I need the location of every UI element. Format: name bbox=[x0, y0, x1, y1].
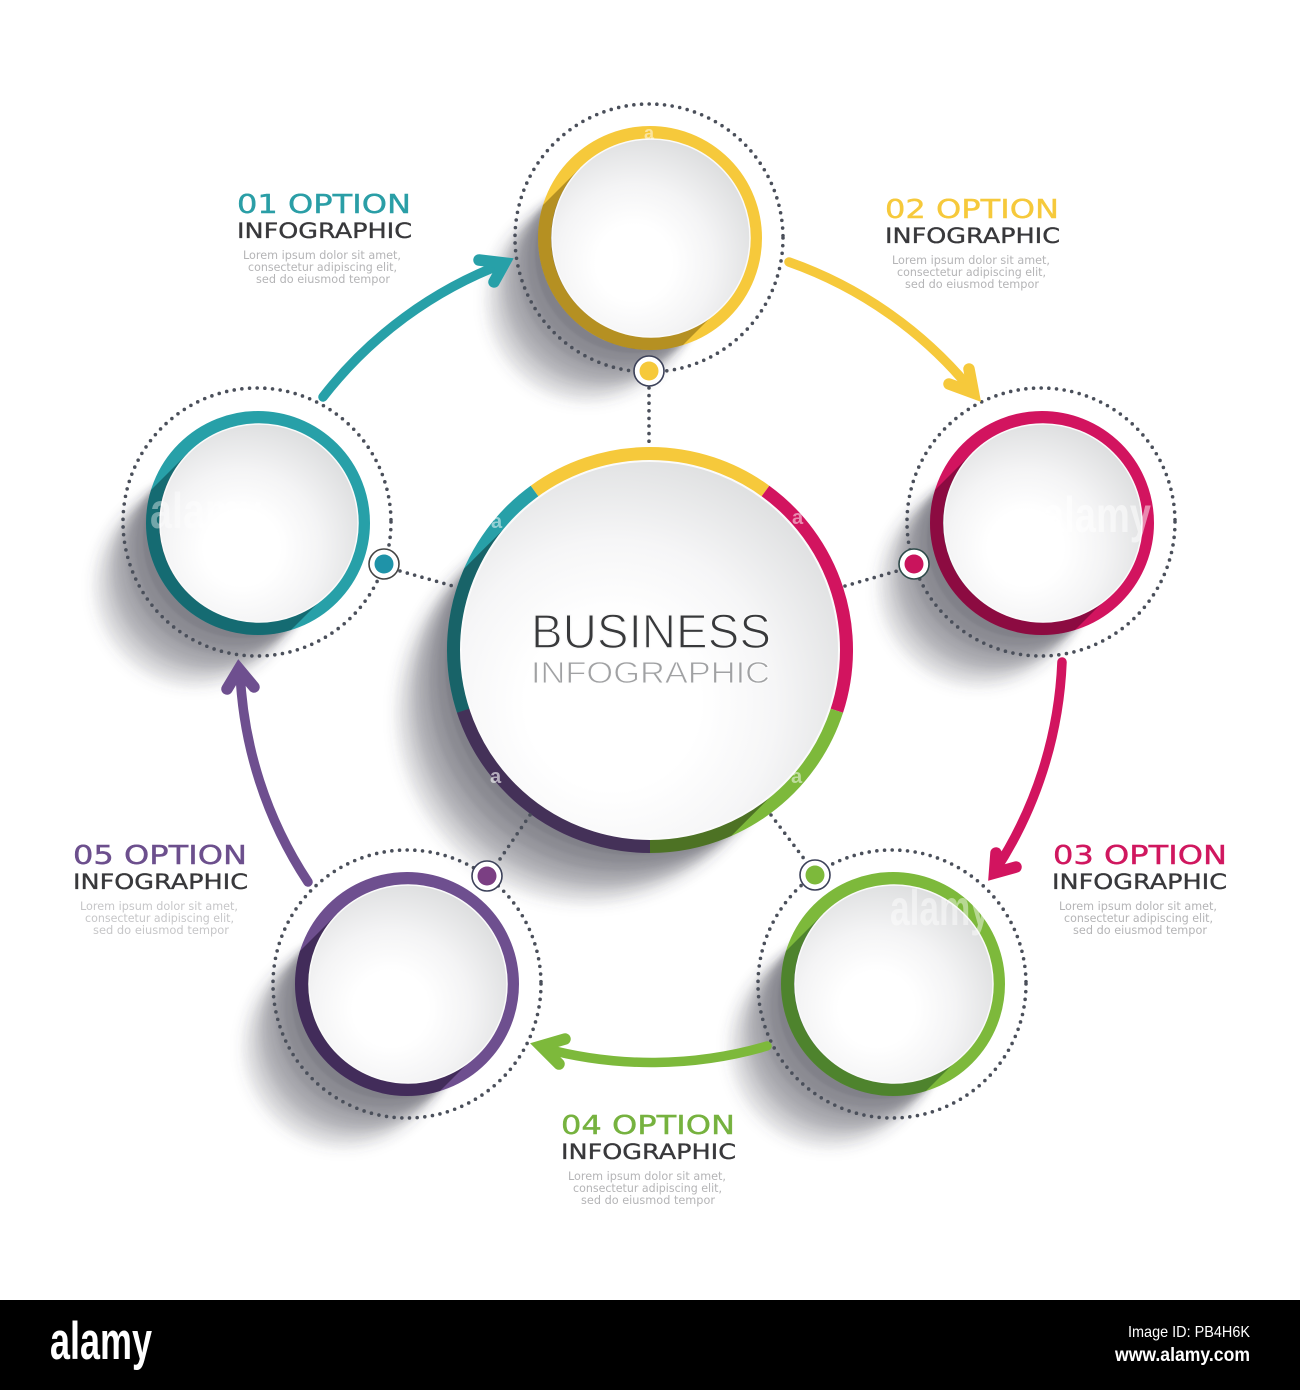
disc bbox=[795, 885, 993, 1083]
step circle: green bbox=[726, 848, 1028, 1151]
body text bbox=[568, 1169, 726, 1207]
node: green bbox=[800, 860, 830, 890]
body text: consectetur adipiscing elit, bbox=[85, 911, 234, 925]
heading: 02 OPTION bbox=[885, 195, 1059, 225]
ring bbox=[152, 418, 364, 628]
watermarks bbox=[150, 123, 1151, 936]
body text: Lorem ipsum dolor sit amet, bbox=[1059, 899, 1217, 913]
subheading: INFOGRAPHIC bbox=[73, 870, 248, 894]
watermarks: a bbox=[490, 766, 502, 788]
footer logo: alamy bbox=[50, 1312, 152, 1371]
footer bar bbox=[0, 1300, 1300, 1390]
central disc bbox=[461, 461, 839, 839]
body text bbox=[80, 899, 238, 937]
shadow bbox=[95, 432, 349, 686]
arrow: yellow to crimson bbox=[789, 262, 974, 393]
site url: www.alamy.com bbox=[1114, 1345, 1250, 1366]
step circle: crimson bbox=[875, 386, 1177, 690]
body text: Lorem ipsum dolor sit amet, bbox=[80, 899, 238, 913]
body text: sed do eiusmod tempor bbox=[581, 1193, 715, 1207]
label: 01 option bbox=[237, 190, 412, 286]
arrow: green to purple bbox=[541, 1039, 767, 1064]
central circle: business infographic bbox=[366, 454, 846, 934]
watermarks: alamy bbox=[890, 880, 990, 936]
watermarks: alamy bbox=[1043, 487, 1151, 543]
ring shade bbox=[146, 453, 317, 635]
body text: consectetur adipiscing elit, bbox=[897, 265, 1046, 279]
disc bbox=[944, 424, 1142, 622]
subheading: INFOGRAPHIC bbox=[1052, 870, 1227, 894]
step circle: yellow bbox=[483, 102, 785, 405]
dotted connectors bbox=[400, 388, 897, 862]
disc bbox=[309, 885, 507, 1083]
central long shadow bbox=[397, 469, 831, 903]
dotted orbit bbox=[123, 388, 391, 656]
body text: Lorem ipsum dolor sit amet, bbox=[892, 253, 1050, 267]
body text bbox=[1059, 899, 1217, 937]
label: 05 option bbox=[73, 841, 248, 937]
body text: consectetur adipiscing elit, bbox=[573, 1181, 722, 1195]
heading: 05 OPTION bbox=[73, 841, 247, 871]
body text: sed do eiusmod tempor bbox=[256, 272, 390, 286]
step circle: teal bbox=[91, 386, 393, 690]
ring bbox=[936, 418, 1148, 628]
label: 02 option bbox=[885, 195, 1060, 291]
label: 04 option bbox=[561, 1111, 736, 1207]
node: teal bbox=[369, 549, 399, 579]
dotted orbit bbox=[907, 388, 1175, 656]
disc bbox=[552, 139, 750, 337]
heading: 01 OPTION bbox=[237, 190, 411, 220]
subheading: INFOGRAPHIC bbox=[237, 219, 412, 243]
ring bbox=[302, 878, 512, 1090]
watermarks: a bbox=[644, 123, 655, 143]
heading: 03 OPTION bbox=[1053, 841, 1227, 871]
node: purple bbox=[472, 861, 502, 891]
ring bbox=[788, 878, 998, 1090]
body text: Lorem ipsum dolor sit amet, bbox=[568, 1169, 726, 1183]
label: 03 option bbox=[1052, 841, 1227, 937]
shadow bbox=[244, 893, 498, 1147]
image id: Image ID: PB4H6K bbox=[1128, 1324, 1250, 1341]
central title bbox=[531, 606, 771, 690]
shadow bbox=[487, 147, 741, 401]
body text: Lorem ipsum dolor sit amet, bbox=[243, 248, 401, 262]
ring shade bbox=[295, 914, 466, 1096]
watermarks: alamy bbox=[150, 483, 262, 539]
ring shade bbox=[930, 453, 1101, 635]
body text: consectetur adipiscing elit, bbox=[248, 260, 397, 274]
disc bbox=[160, 424, 358, 622]
body text bbox=[892, 253, 1050, 291]
dotted orbit bbox=[273, 850, 541, 1118]
body text: sed do eiusmod tempor bbox=[1073, 923, 1207, 937]
watermarks: a bbox=[491, 511, 503, 533]
body text: sed do eiusmod tempor bbox=[905, 277, 1039, 291]
subheading: INFOGRAPHIC bbox=[885, 224, 1060, 248]
body text: sed do eiusmod tempor bbox=[93, 923, 229, 937]
ring shade bbox=[538, 168, 709, 350]
title: business: BUSINESS bbox=[531, 606, 771, 659]
dotted orbit bbox=[515, 104, 783, 372]
watermarks: a bbox=[792, 507, 804, 529]
heading: 04 OPTION bbox=[561, 1111, 735, 1141]
shadow bbox=[879, 432, 1133, 686]
body text: consectetur adipiscing elit, bbox=[1064, 911, 1213, 925]
arrow: purple to teal bbox=[227, 669, 308, 882]
central segmented ring bbox=[454, 454, 846, 846]
shadow bbox=[730, 893, 984, 1147]
subheading: INFOGRAPHIC bbox=[561, 1140, 736, 1164]
node: yellow bbox=[634, 356, 664, 386]
dotted orbit bbox=[758, 850, 1026, 1118]
ring shade bbox=[781, 914, 952, 1096]
ring bbox=[544, 132, 756, 344]
node: crimson bbox=[899, 549, 929, 579]
step circle: purple bbox=[240, 848, 543, 1151]
arrow: crimson to green bbox=[994, 662, 1062, 873]
body text bbox=[243, 248, 401, 286]
title: infographic: INFOGRAPHIC bbox=[531, 655, 770, 690]
central ring shade bbox=[447, 530, 770, 853]
arrow: teal to yellow bbox=[323, 260, 505, 397]
watermarks: a bbox=[791, 766, 803, 788]
